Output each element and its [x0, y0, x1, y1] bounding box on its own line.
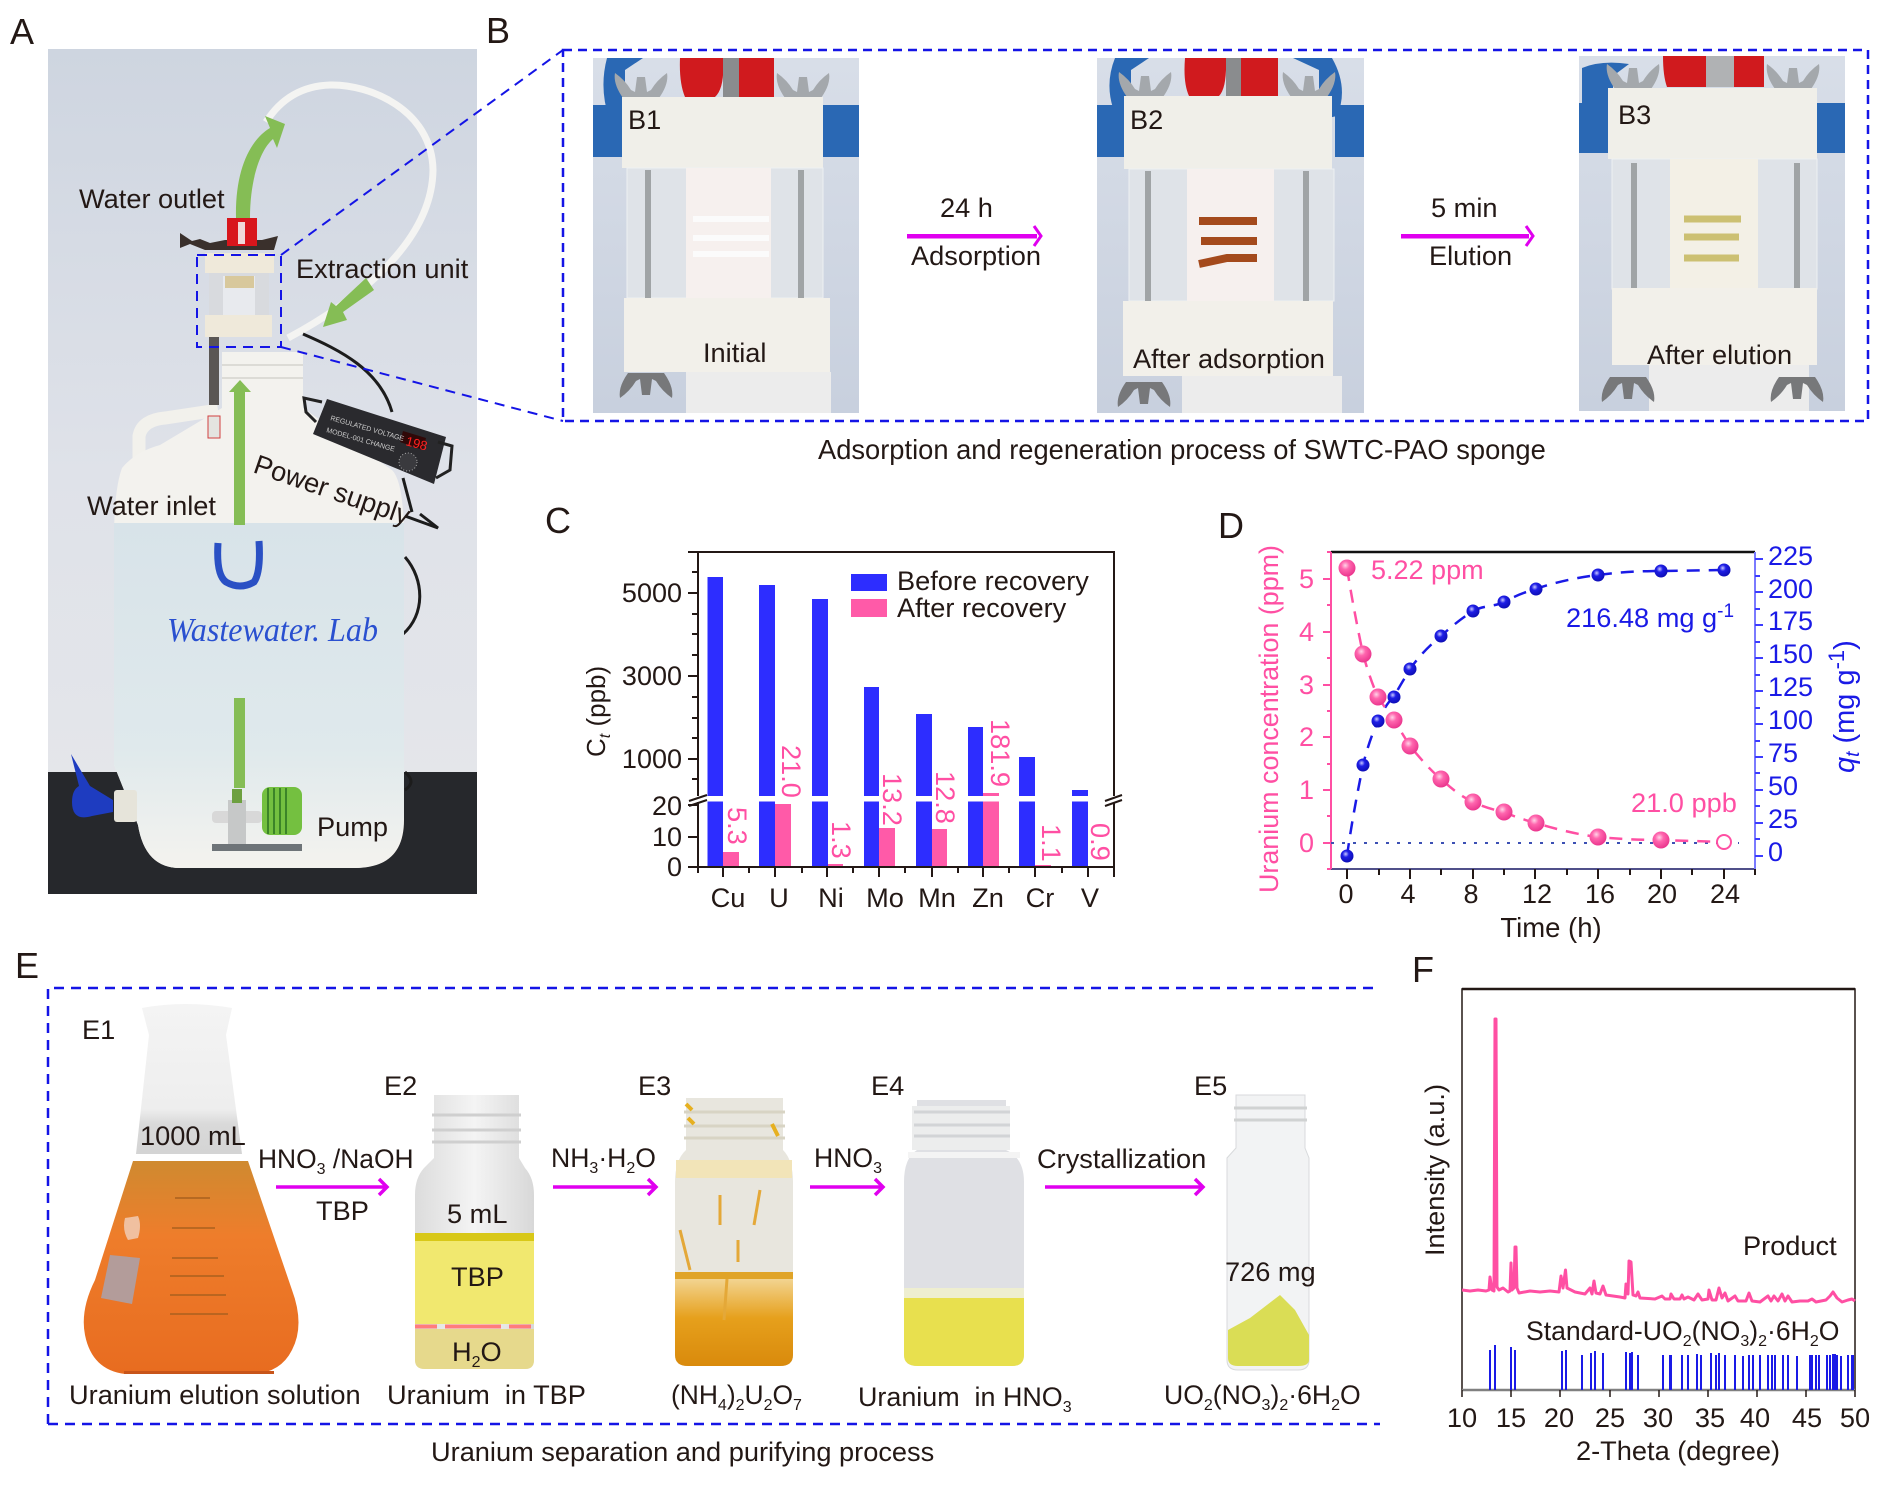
right tick labels chart D: 50 — [1768, 771, 1798, 801]
label standard: 2 — [1810, 1333, 1819, 1350]
y axis title chart F: Intensity (a.u.) — [1419, 1084, 1450, 1256]
label extraction unit: Extraction unit — [296, 253, 469, 284]
left tick labels chart D: 4 — [1299, 617, 1314, 647]
caption E3: 7 — [793, 1397, 802, 1414]
green flow arrow: inlet — [229, 380, 251, 525]
label standard: Standard-UO — [1526, 1316, 1683, 1346]
left ticks chart D — [1323, 552, 1331, 869]
right tick labels chart D: 200 — [1768, 574, 1813, 604]
x tick labels chart D: 24 — [1710, 879, 1740, 909]
x tick labels chart D: 16 — [1585, 879, 1615, 909]
arrow E2 to E3 — [551, 1143, 656, 1195]
legend chart C: After recovery — [897, 592, 1067, 623]
caption E5: 2 — [1331, 1397, 1340, 1414]
label water in vial: O — [481, 1336, 502, 1367]
left tick labels chart D: 0 — [1299, 828, 1314, 858]
rotated value labels chart C: 0.9 — [1085, 823, 1116, 861]
x axis title chart F: 2-Theta (degree) — [1576, 1435, 1780, 1466]
label after adsorption: After adsorption — [1133, 343, 1325, 374]
x category labels chart C — [711, 882, 1100, 913]
caption E5: UO — [1164, 1380, 1204, 1410]
panel letter B: B — [486, 10, 510, 51]
label E4: E4 — [871, 1070, 904, 1101]
white outlet tube — [266, 85, 433, 338]
arrow E2 to E3: 3 — [589, 1160, 598, 1177]
caption panel B: Adsorption and regeneration process of SWTC-PAO sponge — [818, 434, 1546, 465]
photo B3 after elution — [1579, 56, 1845, 411]
right tick labels chart D: 75 — [1768, 738, 1798, 768]
panel C: bar chart — [581, 552, 1122, 913]
y tick labels chart C — [622, 578, 682, 882]
arrow: 24 h adsorption: Adsorption — [911, 240, 1041, 271]
green flow arrow: outlet — [236, 116, 285, 218]
x tick labels chart D: 20 — [1647, 879, 1677, 909]
handwritten label: Wastewater. Lab — [167, 612, 378, 649]
right axis title chart D: q — [1829, 757, 1861, 773]
y axis title chart C: C — [581, 738, 611, 757]
left tick labels chart D: 1 — [1299, 775, 1314, 805]
x tick labels chart F: 35 — [1695, 1402, 1725, 1433]
label initial: Initial — [703, 337, 766, 368]
label E3: E3 — [638, 1070, 671, 1101]
extraction unit in device — [180, 218, 278, 405]
vial E3 orange precipitate — [675, 1098, 793, 1366]
caption E5: (NO — [1213, 1380, 1262, 1410]
photo B1 initial — [593, 58, 859, 413]
power supply unit: 198 — [404, 433, 429, 454]
arrow E3 to E4: 3 — [873, 1160, 882, 1177]
arrow E1 to E2: 3 — [317, 1161, 326, 1178]
label standard: ·6H — [1767, 1316, 1810, 1346]
left axis title chart D: Uranium concentration (ppm) — [1254, 545, 1284, 893]
y axis title chart C: (ppb) — [581, 666, 611, 734]
label product: Product — [1743, 1230, 1837, 1261]
label 726 mg: 726 mg — [1225, 1256, 1316, 1287]
label standard: 2 — [1758, 1333, 1767, 1350]
pump icon — [212, 787, 302, 851]
x category labels chart C: V — [1081, 882, 1100, 913]
left tick labels chart D: 3 — [1299, 670, 1314, 700]
label after elution: After elution — [1647, 339, 1792, 370]
vial E5 yellow crystals — [1227, 1095, 1309, 1370]
label E5: E5 — [1194, 1070, 1227, 1101]
right tick labels chart D: 125 — [1768, 672, 1813, 702]
rotated value labels chart C: 12.8 — [930, 771, 961, 824]
x tick labels chart F: 45 — [1792, 1402, 1822, 1433]
handwritten U — [218, 541, 259, 586]
rotated value labels chart C: 181.9 — [985, 719, 1016, 787]
panel E: dashed frame — [48, 988, 1380, 1424]
x category labels chart C: Cr — [1026, 882, 1054, 913]
right tick labels chart D: 225 — [1768, 541, 1813, 571]
label pump: Pump — [317, 811, 388, 842]
label standard: ) — [1749, 1316, 1758, 1346]
x category labels chart C: Cu — [711, 882, 745, 913]
wastewater bottle — [114, 352, 404, 868]
label water inlet: Water inlet — [87, 490, 216, 521]
panel letter D: D — [1218, 505, 1244, 546]
zoom callout: dashed box and connector lines — [197, 50, 563, 421]
right tick labels chart D: 25 — [1768, 804, 1798, 834]
right axis title chart D: -1 — [1824, 650, 1849, 669]
caption E3: 2 — [764, 1397, 773, 1414]
right tick labels chart D: 175 — [1768, 606, 1813, 636]
x tick labels chart D: 0 — [1338, 879, 1354, 909]
x tick labels chart F: 30 — [1643, 1402, 1673, 1433]
legend chart C: Before recovery — [897, 565, 1089, 596]
panel A: photo of extraction device — [48, 49, 477, 894]
photo B2 after adsorption — [1097, 58, 1364, 413]
caption E1: Uranium elution solution — [69, 1379, 361, 1410]
label B3: B3 — [1618, 99, 1651, 130]
power supply unit: MODEL-001 CHANGE — [325, 427, 396, 454]
right axis title chart D: t — [1843, 751, 1864, 757]
arrow: 5 min elution — [1401, 192, 1533, 271]
arrow: 24 h adsorption: 24 h — [940, 192, 993, 223]
caption E5: O — [1340, 1380, 1361, 1410]
bars after recovery — [723, 793, 1104, 867]
zero reference line — [1331, 842, 1739, 844]
flask E1 with orange solution — [84, 1004, 298, 1374]
caption E5: 3 — [1262, 1397, 1271, 1414]
annotation adsorption capacity: -1 — [1717, 601, 1734, 622]
label standard: 2 — [1683, 1333, 1692, 1350]
caption E4: Uranium in HNO — [858, 1382, 1063, 1412]
caption E3: (NH — [671, 1380, 718, 1410]
caption E3: O — [772, 1380, 793, 1410]
y tick labels chart C: 0 — [667, 852, 682, 882]
arrow: 5 min elution: 5 min — [1431, 192, 1497, 223]
x category labels chart C: Mn — [918, 882, 956, 913]
rotated value labels chart C: 13.2 — [877, 773, 908, 826]
right axis title chart D: (mg g — [1829, 669, 1861, 752]
label E1: E1 — [82, 1014, 115, 1045]
annotation final concentration: 21.0 ppb — [1631, 787, 1737, 818]
panel B: dashed frame — [563, 50, 1868, 421]
panel F: XRD chart — [1419, 989, 1870, 1466]
y tick labels chart C: 10 — [652, 822, 682, 852]
arrow: 24 h adsorption — [907, 192, 1041, 271]
caption E5: ·6H — [1288, 1380, 1331, 1410]
arrow E4 to E5 — [1037, 1143, 1206, 1195]
caption E3: U — [745, 1380, 764, 1410]
label E2: E2 — [384, 1070, 417, 1101]
label water in vial: 2 — [472, 1354, 481, 1371]
x ticks chart F — [1462, 1390, 1855, 1397]
label standard: (NO — [1692, 1316, 1740, 1346]
label water in vial: H — [452, 1336, 472, 1367]
caption E2: Uranium in TBP — [387, 1379, 586, 1410]
caption E3: 4 — [718, 1397, 727, 1414]
y tick labels chart C: 1000 — [622, 744, 682, 774]
caption E3: 2 — [736, 1397, 745, 1414]
rotated value labels chart C: 21.0 — [776, 745, 807, 798]
panel letter C: C — [545, 500, 571, 541]
drain tap — [71, 754, 137, 822]
x tick labels chart D: 4 — [1400, 879, 1416, 909]
label standard: 3 — [1740, 1333, 1749, 1350]
power supply unit — [304, 398, 452, 484]
green flow arrow: pump riser — [234, 698, 245, 788]
x tick labels chart F: 20 — [1544, 1402, 1574, 1433]
vial E2 TBP and water — [415, 1095, 534, 1369]
blue markers adsorption capacity — [1340, 564, 1730, 862]
panel letter A: A — [10, 11, 34, 52]
label water outlet: Water outlet — [79, 183, 225, 214]
left tick labels chart D — [1299, 564, 1314, 858]
x axis title chart D: Time (h) — [1500, 912, 1602, 943]
x tick labels chart D: 12 — [1522, 879, 1552, 909]
y axis title chart C: t — [597, 733, 614, 738]
label power supply: Power supply — [250, 448, 415, 531]
label TBP in vial: TBP — [451, 1261, 504, 1292]
right tick labels chart D: 100 — [1768, 705, 1813, 735]
legend chart C — [851, 565, 1089, 623]
bars before recovery — [708, 577, 1088, 867]
arrow: 5 min elution: Elution — [1429, 240, 1512, 271]
frame chart D — [1331, 551, 1755, 553]
arrow E2 to E3: ·H — [598, 1143, 626, 1173]
caption E5: 2 — [1204, 1397, 1213, 1414]
x tick labels chart F — [1447, 1402, 1870, 1433]
blue dashed curve — [1347, 570, 1724, 856]
x category labels chart C: Ni — [818, 882, 844, 913]
flask graduations — [170, 1198, 228, 1314]
arrow E1 to E2: TBP — [316, 1195, 369, 1226]
x tick labels chart F: 10 — [1447, 1402, 1477, 1433]
arrow E1 to E2 — [258, 1144, 414, 1226]
label B1: B1 — [628, 104, 661, 135]
x tick labels chart F: 50 — [1840, 1402, 1870, 1433]
bottom ticks chart D — [1347, 869, 1755, 879]
axes of chart C — [688, 552, 1122, 877]
panel letter E: E — [15, 945, 39, 986]
panel letter F: F — [1412, 949, 1434, 990]
label standard: O — [1819, 1316, 1839, 1346]
x tick labels chart D — [1338, 879, 1740, 909]
right tick labels chart D: 150 — [1768, 639, 1813, 669]
arrow E2 to E3: NH — [551, 1143, 589, 1173]
caption E5: 2 — [1279, 1397, 1288, 1414]
caption panel E: Uranium separation and purifying process — [431, 1436, 934, 1467]
annotation adsorption capacity: 216.48 mg g — [1566, 602, 1717, 633]
y tick labels chart C: 3000 — [622, 661, 682, 691]
x category labels chart C: Zn — [972, 882, 1004, 913]
arrow E2 to E3: O — [635, 1143, 656, 1173]
annotation initial concentration: 5.22 ppm — [1371, 555, 1484, 585]
left tick labels chart D: 2 — [1299, 722, 1314, 752]
caption E5: ) — [1270, 1380, 1279, 1410]
arrow E4 to E5: Crystallization — [1037, 1143, 1206, 1174]
power supply unit: REGULATED VOLTAGE — [329, 415, 405, 443]
left tick labels chart D: 5 — [1299, 564, 1314, 594]
x tick labels chart F: 15 — [1496, 1402, 1526, 1433]
rotated value labels chart C: 1.1 — [1036, 824, 1067, 862]
x tick labels chart F: 25 — [1595, 1402, 1625, 1433]
panel D: kinetics chart — [1254, 541, 1864, 943]
rotated value labels chart C: 1.3 — [826, 821, 857, 859]
frame chart F — [1462, 989, 1855, 1390]
arrow E3 to E4: HNO — [814, 1143, 873, 1173]
rotated value labels chart C: 5.3 — [722, 807, 753, 845]
x category labels chart C: U — [769, 882, 789, 913]
right tick labels chart D — [1768, 541, 1813, 867]
label volume 1000 mL: 1000 mL — [140, 1120, 246, 1151]
y tick labels chart C: 5000 — [622, 578, 682, 608]
label B2: B2 — [1130, 104, 1163, 135]
standard reference sticks — [1490, 1345, 1853, 1390]
x tick labels chart F: 40 — [1740, 1402, 1770, 1433]
caption E3: ) — [727, 1380, 736, 1410]
arrow E3 to E4 — [810, 1143, 883, 1195]
arrow E1 to E2: /NaOH — [326, 1144, 414, 1174]
green flow arrow: power to unit — [323, 278, 374, 327]
vial E4 yellow solution — [904, 1100, 1024, 1366]
power cables — [303, 334, 438, 790]
right tick labels chart D: 0 — [1768, 837, 1783, 867]
x tick labels chart D: 8 — [1463, 879, 1479, 909]
x category labels chart C: Mo — [866, 882, 904, 913]
rotated value labels chart C — [722, 719, 1116, 862]
caption E4: 3 — [1063, 1399, 1072, 1416]
right ticks chart D — [1755, 559, 1763, 856]
pink dashed curve — [1347, 568, 1724, 842]
pink markers uranium concentration — [1338, 560, 1731, 849]
arrow E2 to E3: 2 — [626, 1160, 635, 1177]
y tick labels chart C: 20 — [652, 791, 682, 821]
product diffraction pattern — [1462, 1019, 1855, 1302]
arrow E1 to E2: HNO — [258, 1144, 317, 1174]
label 5 mL: 5 mL — [447, 1198, 507, 1229]
right axis title chart D: ) — [1829, 640, 1861, 650]
